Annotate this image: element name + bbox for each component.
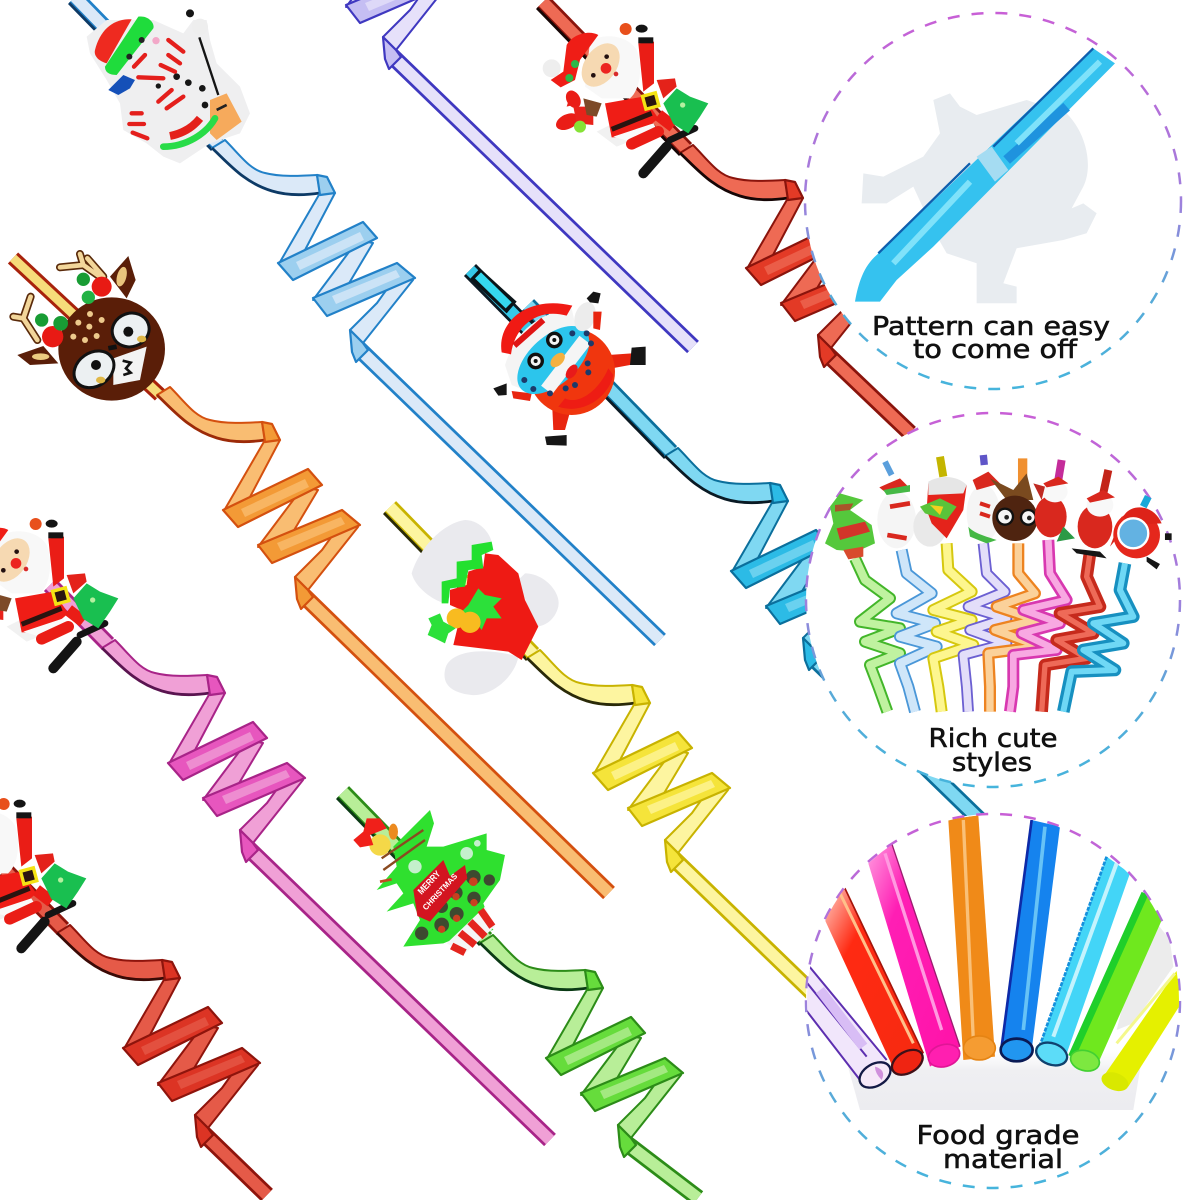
caption: material <box>943 1145 1063 1175</box>
caption: Food grade <box>916 1121 1080 1151</box>
circle: pattern can easy to come off <box>805 13 1181 389</box>
caption <box>916 1121 1080 1175</box>
pendant: reindeer <box>13 254 165 401</box>
caption: Pattern can easy <box>872 312 1110 342</box>
caption <box>928 724 1058 778</box>
straw: magenta <box>50 585 550 1140</box>
straw: red bottom <box>5 870 267 1195</box>
straw: green <box>337 792 698 1198</box>
circle: food grade material <box>803 814 1183 1188</box>
pendant: christmas tree: CHRISTMAS <box>421 871 460 912</box>
pendant: round santa <box>470 268 646 446</box>
straw: blue <box>69 0 660 640</box>
caption: styles <box>952 748 1032 778</box>
pendant: christmas tree: MERRY <box>416 868 443 896</box>
straw: cyan <box>470 270 988 828</box>
pendant: santa on magenta straw <box>0 518 118 668</box>
mini straws group <box>825 455 1172 712</box>
pendant: christmas tree <box>353 810 505 953</box>
circle: rich cute styles <box>806 413 1180 787</box>
ghost silhouette and blue straw <box>855 48 1115 303</box>
pendant: snowman <box>87 9 250 163</box>
caption: to come off <box>913 335 1078 365</box>
straw: yellow <box>384 507 825 1005</box>
caption: Rich cute <box>928 724 1058 754</box>
mini pendants <box>825 472 1172 569</box>
caption <box>872 312 1110 365</box>
coloured tubes fan <box>803 815 1183 1110</box>
pendant: santa top <box>543 23 708 173</box>
pendant: santa on red straw <box>0 798 86 948</box>
straw: purple <box>245 0 693 347</box>
straw: red top <box>537 2 910 433</box>
pendant: stocking <box>412 520 559 695</box>
straw: orange <box>13 258 609 893</box>
